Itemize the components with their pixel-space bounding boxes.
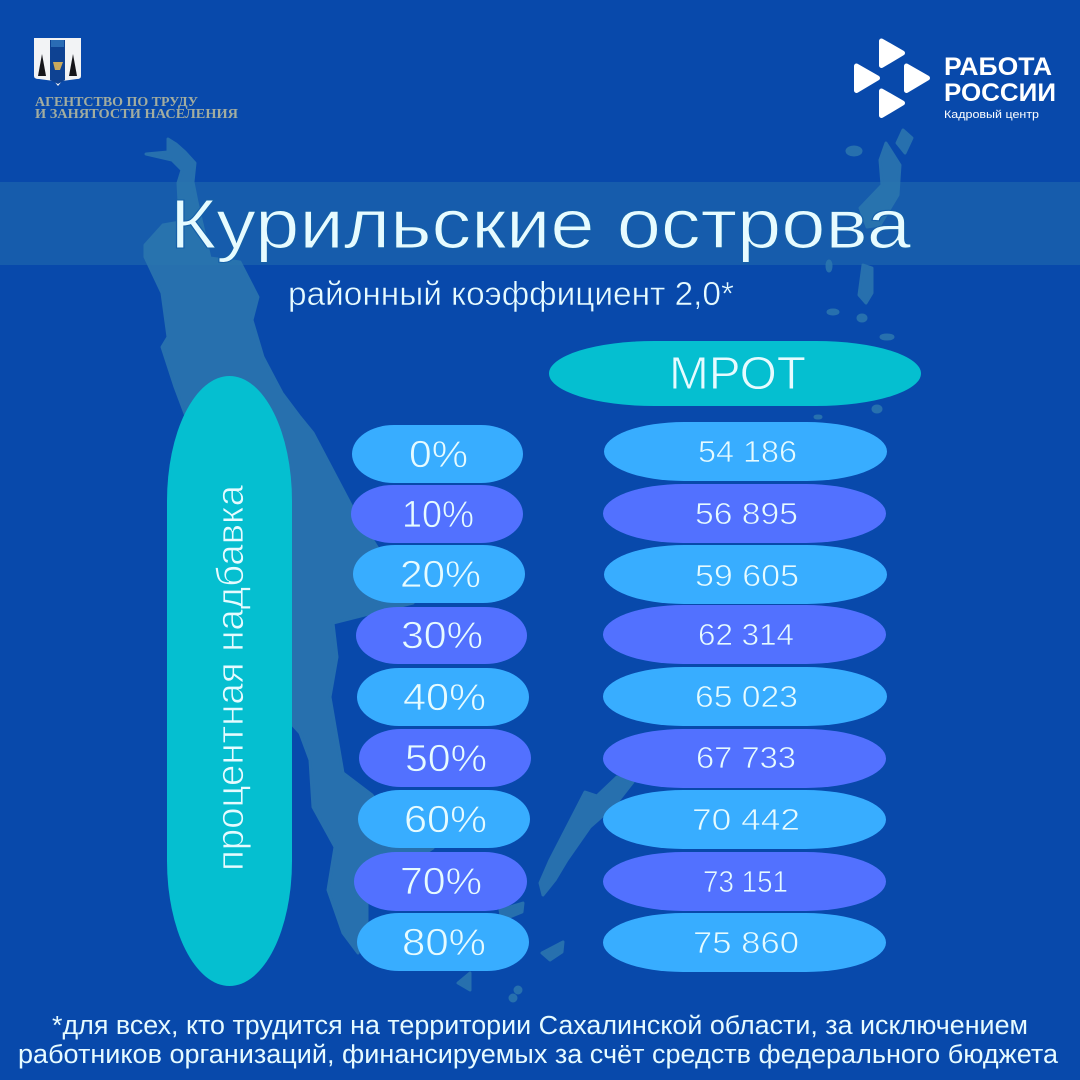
title band	[0, 182, 1080, 265]
side panel: процентная надбавка: процентная надбавка	[210, 484, 252, 871]
agency name: АГЕНТСТВО ПО ТРУДУ	[35, 95, 198, 110]
percent 30: 30%	[401, 615, 483, 657]
footnote	[18, 1012, 1059, 1069]
title: Курильские острова	[170, 185, 911, 263]
agency name: И ЗАНЯТОСТИ НАСЕЛЕНИЯ	[35, 107, 238, 122]
logo: Работа России: Кадровый центр	[944, 109, 1039, 121]
value 54 186: 54 186	[698, 434, 797, 469]
value 75 860	[603, 913, 886, 972]
value 75 860: 75 860	[693, 925, 799, 960]
percent 70: 70%	[400, 861, 482, 903]
logo: Работа России: РОССИИ	[944, 79, 1056, 107]
MROT values column	[603, 422, 887, 972]
footnote: *для всех, кто трудится на территории Сахалинской области, за исключением	[52, 1012, 1028, 1040]
logo: Работа России: РАБОТА	[944, 53, 1052, 81]
value 73 151: 73 151	[703, 864, 788, 899]
percent 30	[356, 607, 527, 664]
value 56 895	[603, 484, 886, 543]
map: Sakhalin and Kuril islands	[145, 130, 912, 1001]
percent 80: 80%	[402, 922, 486, 964]
percent 60	[358, 790, 530, 848]
value 67 733	[603, 729, 886, 788]
subtitle: районный коэффициент 2,0*	[288, 275, 734, 312]
header: МРОТ: МРОТ	[669, 347, 806, 399]
percent 40	[357, 668, 529, 726]
percent 20	[353, 545, 525, 603]
percent 10	[351, 485, 523, 543]
header: МРОТ	[549, 341, 921, 406]
percent 70	[354, 852, 527, 911]
percent 0: 0%	[409, 434, 468, 476]
value 62 314: 62 314	[698, 617, 794, 652]
percent 40: 40%	[403, 677, 486, 719]
percent 20: 20%	[400, 554, 481, 596]
agency name	[35, 95, 238, 122]
value 65 023: 65 023	[695, 679, 798, 714]
percent 80	[357, 913, 529, 971]
percent column	[351, 425, 531, 971]
value 56 895: 56 895	[695, 496, 798, 531]
percent 50	[359, 729, 531, 787]
value 54 186	[604, 422, 887, 481]
logo: Работа России	[856, 41, 1056, 121]
value 65 023	[603, 667, 887, 726]
value 67 733: 67 733	[696, 740, 796, 775]
value 70 442	[603, 790, 886, 849]
value 73 151	[603, 852, 886, 911]
value 62 314	[603, 605, 886, 664]
percent 0	[352, 425, 523, 483]
value 59 605: 59 605	[695, 558, 799, 593]
logo: agency coat of arms	[34, 38, 81, 86]
side panel: процентная надбавка	[167, 376, 292, 986]
footnote: работников организаций, финансируемых за счёт средств федерального бюджета	[18, 1041, 1059, 1069]
value 70 442: 70 442	[692, 802, 800, 837]
percent 10: 10%	[402, 494, 474, 536]
percent 50: 50%	[405, 738, 487, 780]
percent 60: 60%	[404, 799, 487, 841]
value 59 605	[604, 545, 887, 604]
